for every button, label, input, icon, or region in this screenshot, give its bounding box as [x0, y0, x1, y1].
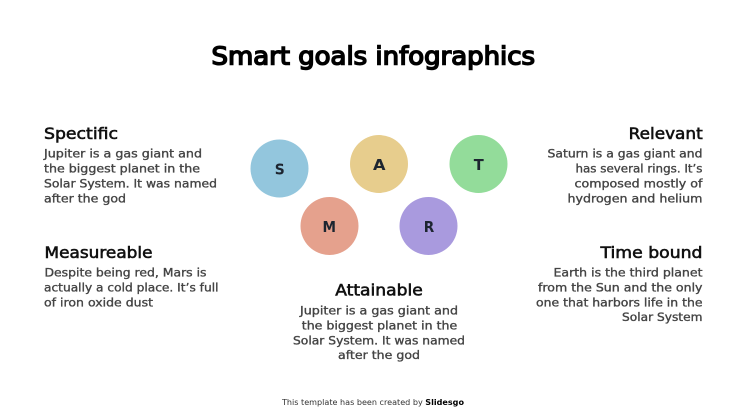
circle: T: T [474, 156, 484, 174]
circle: A: A [373, 156, 386, 174]
circle: R: R [424, 218, 435, 236]
text block: Specific description [43, 147, 217, 205]
heading: Time bound: Time bound [599, 243, 702, 262]
text block: Specific description: the biggest planet in the [44, 162, 200, 176]
title: Smart goals infographics [212, 42, 535, 70]
SMART circles [250, 135, 508, 255]
circle: R [400, 197, 458, 255]
text block: Measureable description: of iron oxide dust [44, 295, 153, 309]
circle: S [250, 140, 308, 198]
text block: Specific description: Jupiter is a gas giant and [43, 147, 202, 161]
panel: Specific [43, 124, 217, 205]
circle: M: M [323, 218, 336, 236]
circle: A [350, 135, 408, 193]
circle: M [300, 197, 358, 255]
text block: Measureable description: Despite being red, Mars is [44, 266, 206, 280]
text block: Relevant description: has several rings. It’s [576, 162, 702, 176]
text block: Attainable description: the biggest planet in the [302, 319, 457, 333]
text block: Time bound description [536, 266, 703, 324]
text block: Attainable description [293, 304, 465, 362]
text block: Attainable description: after the god [338, 348, 420, 362]
text block: Attainable description: Solar System. It was named [293, 333, 465, 347]
heading: Attainable: Attainable [335, 281, 423, 300]
text block: Specific description: after the god [44, 191, 126, 205]
heading: Measureable: Measureable [44, 243, 152, 262]
text block: Time bound description: from the Sun and the only [538, 281, 703, 295]
text block: Time bound description: Solar System [622, 310, 702, 324]
panel: Measureable [44, 243, 218, 309]
text block: Relevant description: Saturn is a gas giant and [548, 147, 702, 161]
text block: Time bound description: Earth is the third planet [554, 266, 703, 280]
circle: T [450, 135, 508, 193]
text block: Relevant description: composed mostly of [574, 176, 703, 190]
text block: Time bound description: one that harbors life in the [536, 295, 702, 309]
heading: Specific: Spectific [44, 124, 118, 143]
text block: Attainable description: Jupiter is a gas giant and [299, 304, 458, 318]
text block: Specific description: Solar System. It was named [44, 176, 217, 190]
text block: Measureable description [44, 266, 218, 309]
text block: Relevant description [548, 147, 703, 205]
panel: Attainable [293, 281, 465, 362]
text block: Relevant description: hydrogen and helium [568, 191, 702, 205]
footer credit: This template has been created by Slidesgo [281, 398, 465, 407]
circle: S: S [275, 161, 285, 179]
heading: Relevant: Relevant [629, 124, 703, 143]
text block: Measureable description: actually a cold place. It’s full [44, 281, 218, 295]
panel: Relevant [548, 124, 703, 205]
panel: Time bound [536, 243, 703, 324]
